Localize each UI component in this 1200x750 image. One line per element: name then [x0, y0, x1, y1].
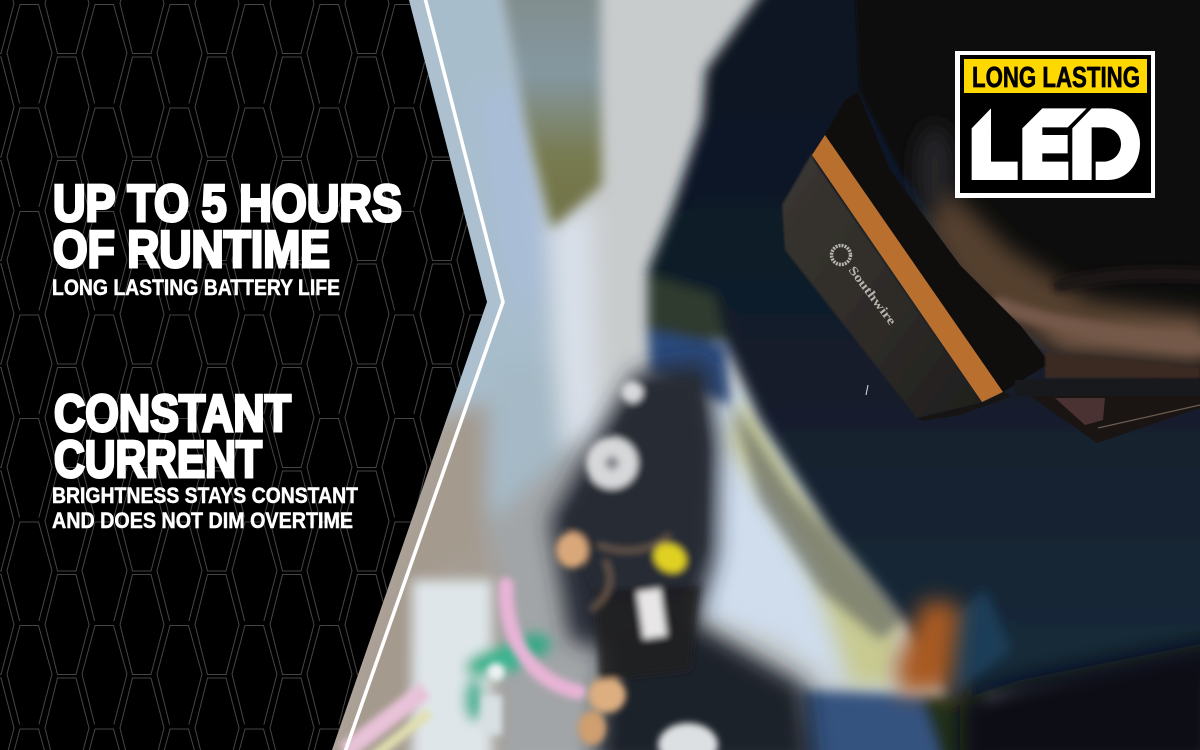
brand name: Southwire: [846, 263, 899, 328]
orange stripe: [812, 135, 1003, 402]
subheading: brightness: BRIGHTNESS STAYS CONSTANT: [52, 483, 358, 508]
subheading: brightness: [52, 483, 358, 533]
translucent band between panel and white line: [332, 0, 503, 750]
heading: up to 5 hours of runtime: [53, 175, 402, 279]
lamp logo: [832, 246, 850, 264]
glasses: [1030, 396, 1200, 443]
gloves and hand: [550, 362, 815, 750]
subheading: brightness: AND DOES NOT DIM OVERTIME: [52, 508, 353, 533]
heading: constant current: CONSTANT: [54, 385, 291, 443]
heading: up to 5 hours of runtime: UP TO 5 HOURS: [53, 175, 402, 233]
heading: constant current: [54, 385, 291, 489]
panel: black chevron with hexagon pattern: [0, 0, 487, 750]
headlamp rear housing: [825, 92, 1050, 392]
heading: constant current: CURRENT: [54, 431, 262, 489]
jacket: [648, 0, 1200, 750]
olive window stripe: [498, 0, 602, 228]
subheading: battery life: LONG LASTING BATTERY LIFE: [52, 275, 340, 300]
badge: long lasting LED: [955, 51, 1155, 198]
banner label: LONG LASTING: [972, 62, 1140, 94]
hair: [855, 0, 1200, 385]
yellow banner: [964, 59, 1147, 93]
white chevron outline: [345, 0, 503, 750]
headlamp body: [782, 153, 982, 418]
text block: runtime: [52, 175, 402, 300]
blurred workspace background: [310, 0, 960, 750]
heading: up to 5 hours of runtime: OF RUNTIME: [53, 221, 330, 279]
text block: constant current: [52, 385, 358, 533]
wires and device: [412, 580, 551, 750]
strap: [1015, 377, 1200, 396]
LED logo letters: [972, 108, 1140, 180]
headlamp: [782, 92, 1200, 443]
